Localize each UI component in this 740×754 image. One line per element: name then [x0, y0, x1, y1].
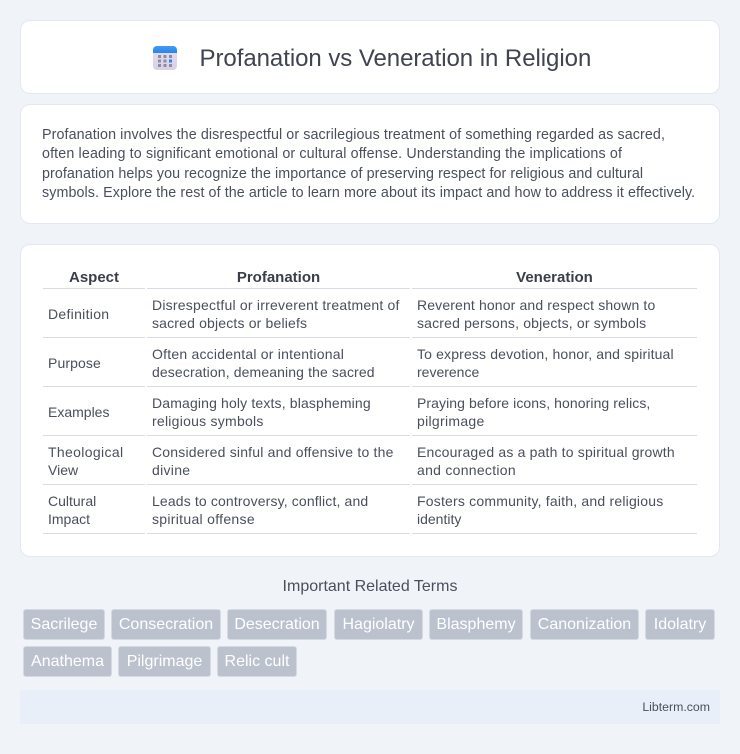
row: definition: sacred objects or beliefs [152, 315, 307, 331]
row: purpose: reverence [417, 364, 479, 380]
row: theological view [48, 444, 675, 478]
intro text: often leading to significant emotional or cultural offense. Understanding the implications of [42, 146, 622, 162]
related terms heading: Important Related Terms [283, 578, 457, 595]
intro text: profanation helps you recognize the importance of preserving respect for religious and cultural [42, 166, 643, 182]
row: theological view: divine [152, 462, 190, 478]
row: cultural impact: Impact [48, 511, 90, 527]
related term tags: Canonization [538, 616, 631, 633]
related term tags: Sacrilege [31, 616, 97, 633]
row: definition: Disrespectful or irreverent treatment of [152, 297, 400, 313]
row: examples: Praying before icons, honoring relics, [417, 395, 650, 411]
title: Profanation vs Veneration in Religion [200, 45, 591, 72]
related term tags: Desecration [234, 616, 320, 633]
row: definition: Reverent honor and respect shown to [417, 297, 655, 313]
table card [20, 244, 720, 557]
row: theological view: Considered sinful and offensive to the [152, 444, 394, 460]
row: cultural impact: identity [417, 511, 461, 527]
related term tags: Hagiolatry [342, 616, 415, 633]
comparison table [43, 269, 697, 534]
row: definition [48, 297, 655, 331]
intro text [42, 127, 695, 201]
row: cultural impact [48, 493, 663, 527]
row: purpose: To express devotion, honor, and spiritual [417, 346, 674, 362]
row: examples: Examples [48, 404, 109, 420]
row: examples [48, 395, 650, 429]
row: cultural impact: spiritual offense [152, 511, 255, 527]
footer brand: Libterm.com [642, 700, 710, 714]
row: definition: Definition [48, 306, 109, 322]
related term tags: Relic cult [225, 653, 289, 670]
intro text: symbols. Explore the rest of the article to learn more about its impact and how to address it effectively. [42, 185, 695, 201]
row: examples: pilgrimage [417, 413, 485, 429]
icon: calendar [153, 46, 177, 70]
row: theological view: Encouraged as a path to spiritual growth [417, 444, 675, 460]
row: theological view: Theological [48, 444, 123, 460]
row: definition: sacred persons, objects, or symbols [417, 315, 646, 331]
row: cultural impact: Leads to controversy, conflict, and [152, 493, 368, 509]
related term tags: Consecration [119, 616, 213, 633]
row: purpose: Often accidental or intentional [152, 346, 344, 362]
intro text: Profanation involves the disrespectful or sacrilegious treatment of something regarded as sacred, [42, 127, 665, 143]
row: theological view: View [48, 462, 78, 478]
row: cultural impact: Fosters community, faith, and religious [417, 493, 663, 509]
row: theological view: and connection [417, 462, 516, 478]
column headers: Veneration [516, 269, 593, 286]
row: purpose: Purpose [48, 355, 101, 371]
row: purpose: desecration, demeaning the sacred [152, 364, 375, 380]
related term tags: Blasphemy [436, 616, 516, 633]
intro card [20, 104, 720, 224]
column headers: Profanation [237, 269, 320, 286]
column headers: Aspect [69, 269, 119, 286]
header card [20, 20, 720, 94]
related term tags: Anathema [31, 653, 104, 670]
row: cultural impact: Cultural [48, 493, 96, 509]
footer bar [20, 690, 720, 724]
related term tags: Idolatry [654, 616, 706, 633]
row: purpose [48, 346, 674, 380]
row: examples: religious symbols [152, 413, 264, 429]
related term tags [23, 609, 715, 677]
row: examples: Damaging holy texts, blaspheming [152, 395, 371, 411]
related term tags: Pilgrimage [127, 653, 202, 670]
column headers [69, 269, 593, 286]
